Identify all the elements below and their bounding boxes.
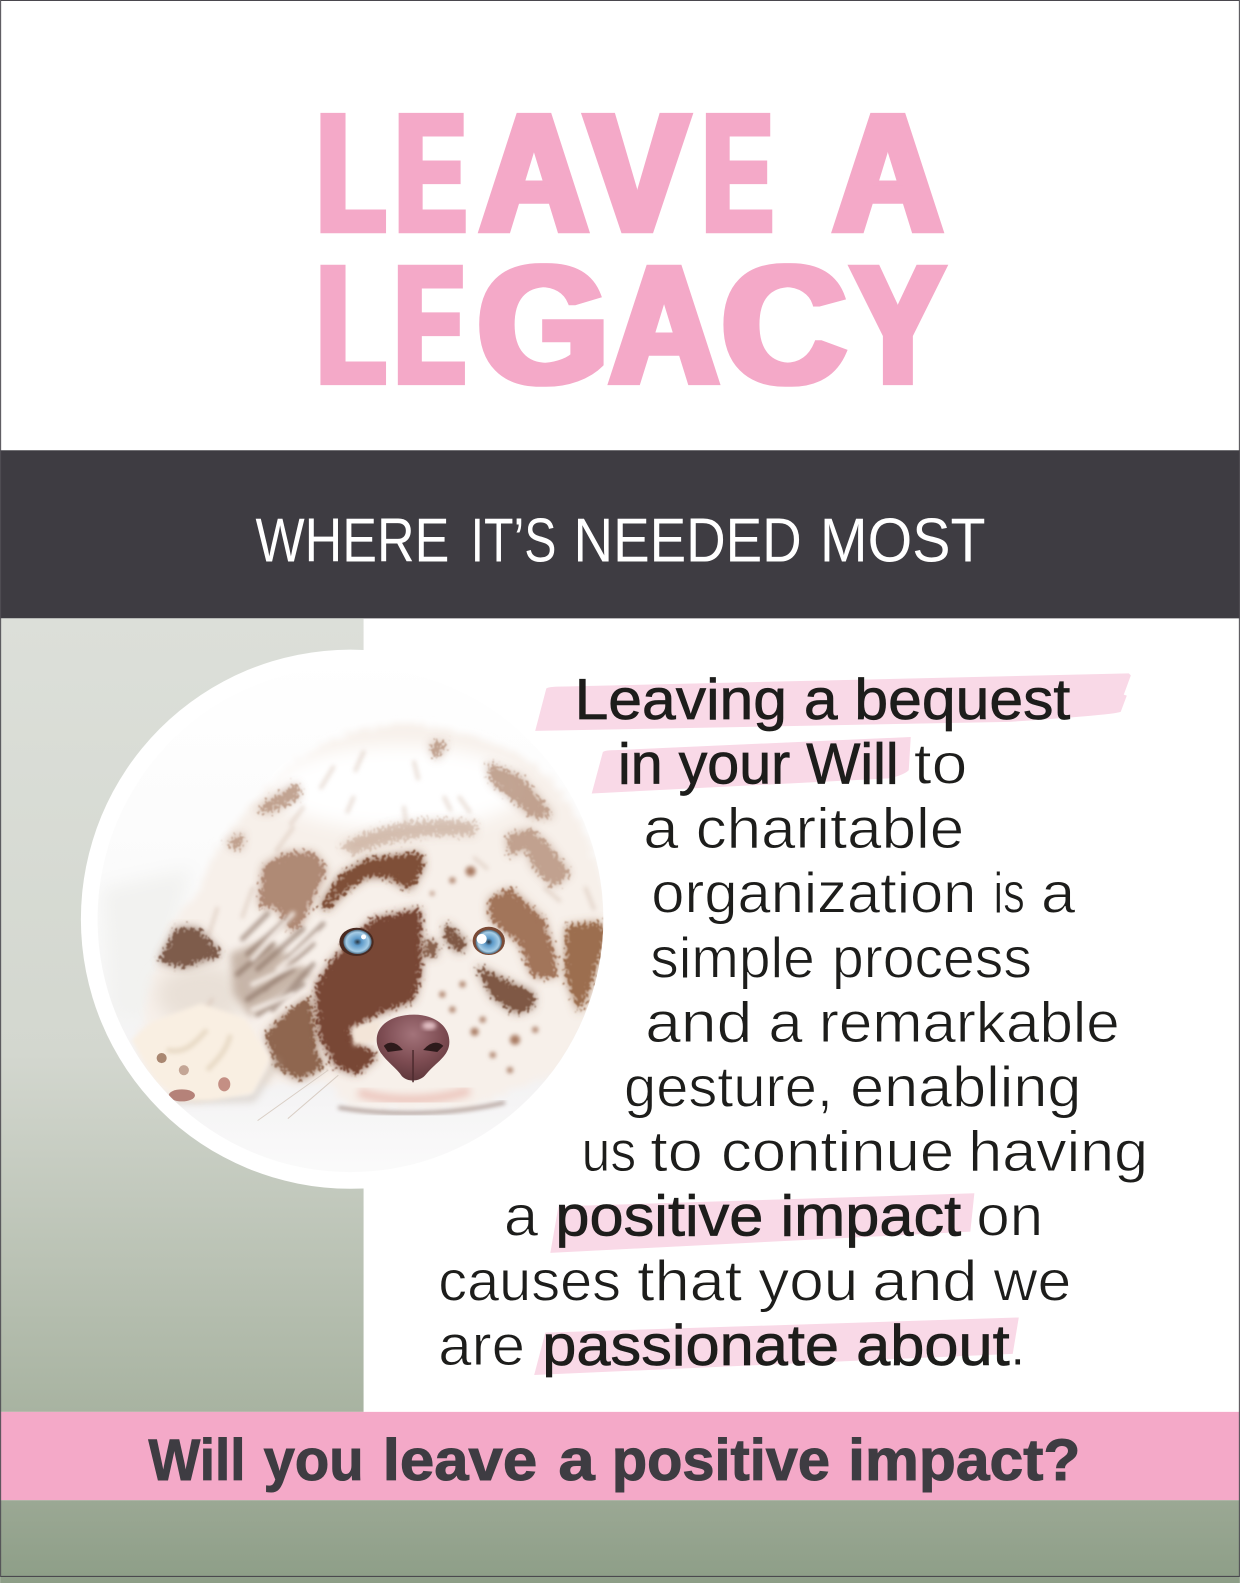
dark patch on left shoulder bbox=[160, 929, 221, 966]
body text: bequest paragraph: enabling bbox=[850, 1055, 1081, 1119]
call to action band: you bbox=[264, 1428, 364, 1493]
body text: bequest paragraph: are bbox=[438, 1314, 525, 1378]
photo: puppy lying down in a circle bbox=[98, 722, 604, 1134]
face speckles bbox=[430, 866, 538, 1073]
body text: bequest paragraph: a bbox=[1041, 862, 1075, 926]
body text: bequest paragraph: a bbox=[643, 797, 679, 861]
right eye bbox=[473, 927, 505, 955]
body text: bequest paragraph: you bbox=[758, 1249, 858, 1313]
call to action band: a bbox=[558, 1428, 595, 1493]
banner: where it's needed most bbox=[0, 450, 1240, 618]
body text: bequest paragraph: us bbox=[582, 1120, 636, 1184]
banner: where it's needed most: WHERE bbox=[256, 505, 449, 575]
body text: bequest paragraph: a bbox=[768, 991, 803, 1055]
body text: bequest paragraph: continue bbox=[721, 1120, 954, 1184]
body text: bequest paragraph: and bbox=[872, 1249, 977, 1313]
call to action band: Will bbox=[149, 1428, 245, 1493]
left side of head, mottled fur bbox=[260, 853, 326, 933]
title: Leave a Legacy: G bbox=[478, 231, 608, 419]
title: Leave a Legacy: A bbox=[610, 231, 718, 419]
front paw bbox=[131, 1004, 278, 1101]
title: Leave a Legacy: L bbox=[318, 79, 385, 267]
title: Leave a Legacy: Y bbox=[852, 231, 944, 419]
call to action band bbox=[0, 1412, 1240, 1500]
body text: bequest paragraph: a bbox=[504, 1185, 538, 1249]
body text: bequest paragraph: and bbox=[645, 991, 752, 1055]
right ear bbox=[566, 923, 606, 1013]
body text: bequest paragraph: process bbox=[832, 926, 1032, 990]
left eye bbox=[339, 928, 374, 956]
body text: bequest paragraph: causes bbox=[438, 1249, 621, 1313]
nose bbox=[377, 1015, 449, 1082]
brown patch around left eye and muzzle bbox=[316, 910, 420, 1073]
brown cap over left eye bbox=[320, 853, 423, 910]
body text: bequest paragraph: having bbox=[968, 1120, 1148, 1184]
body highlight bbox=[273, 745, 525, 830]
title: Leave a Legacy: E bbox=[704, 79, 772, 267]
white muzzle speckle bbox=[352, 1020, 382, 1046]
puppy body fur bbox=[137, 725, 606, 1109]
neck under left cheek bbox=[267, 996, 323, 1079]
body text: bequest paragraph: . bbox=[1010, 1314, 1026, 1378]
left cheek fur streaks bbox=[230, 914, 323, 1017]
call to action band: positive bbox=[612, 1428, 830, 1493]
body text: bequest paragraph: positive impact bbox=[555, 1185, 961, 1249]
body text: bequest paragraph: to bbox=[650, 1120, 703, 1184]
body text: bequest paragraph: remarkable bbox=[819, 991, 1120, 1055]
body text: bequest paragraph: we bbox=[992, 1249, 1071, 1313]
body text: bequest paragraph: passionate about bbox=[542, 1314, 1010, 1378]
brown patches right of face bbox=[423, 889, 556, 1013]
footer band bbox=[0, 1500, 1240, 1583]
muzzle pink under nose bbox=[359, 1090, 470, 1100]
white circular ring behind photo bbox=[81, 650, 620, 1189]
body text: bequest paragraph: simple bbox=[650, 926, 815, 990]
title: Leave a Legacy: C bbox=[722, 231, 846, 419]
background shading at left bbox=[109, 880, 180, 962]
shadow under chin bbox=[338, 1102, 505, 1113]
fur mottling on back bbox=[226, 743, 570, 886]
body text: bequest paragraph: organization bbox=[651, 862, 976, 926]
title: Leave a Legacy: A bbox=[480, 79, 588, 267]
title: Leave a Legacy: E bbox=[396, 79, 465, 267]
banner: where it's needed most: NEEDED bbox=[574, 505, 802, 575]
title: Leave a Legacy: E bbox=[395, 231, 464, 419]
body text: bequest paragraph bbox=[438, 668, 1148, 1378]
body text: bequest paragraph: on bbox=[976, 1185, 1043, 1249]
body text: bequest paragraph: gesture, bbox=[624, 1055, 833, 1119]
banner: where it's needed most: IT’S bbox=[471, 505, 556, 575]
body text: bequest paragraph: is bbox=[994, 862, 1025, 926]
pink highlight strokes bbox=[534, 673, 1131, 1375]
title: Leave a Legacy: V bbox=[586, 79, 688, 267]
body text: bequest paragraph: in your Will bbox=[618, 732, 899, 796]
whiskers bbox=[258, 1070, 338, 1121]
body text: bequest paragraph: Leaving a bequest bbox=[575, 668, 1070, 732]
call to action band: leave bbox=[383, 1428, 537, 1493]
body text: bequest paragraph: to bbox=[914, 732, 967, 796]
title: Leave a Legacy: L bbox=[318, 231, 385, 419]
title: Leave a Legacy: A bbox=[834, 79, 942, 267]
banner: where it's needed most: MOST bbox=[820, 505, 985, 575]
body text: bequest paragraph: charitable bbox=[696, 797, 964, 861]
fur strokes bbox=[202, 752, 594, 1016]
body text: bequest paragraph: that bbox=[637, 1249, 742, 1313]
call to action band: impact? bbox=[848, 1428, 1080, 1493]
title: Leave a Legacy bbox=[318, 79, 944, 419]
panel: sage gradient side column bbox=[0, 618, 364, 1412]
